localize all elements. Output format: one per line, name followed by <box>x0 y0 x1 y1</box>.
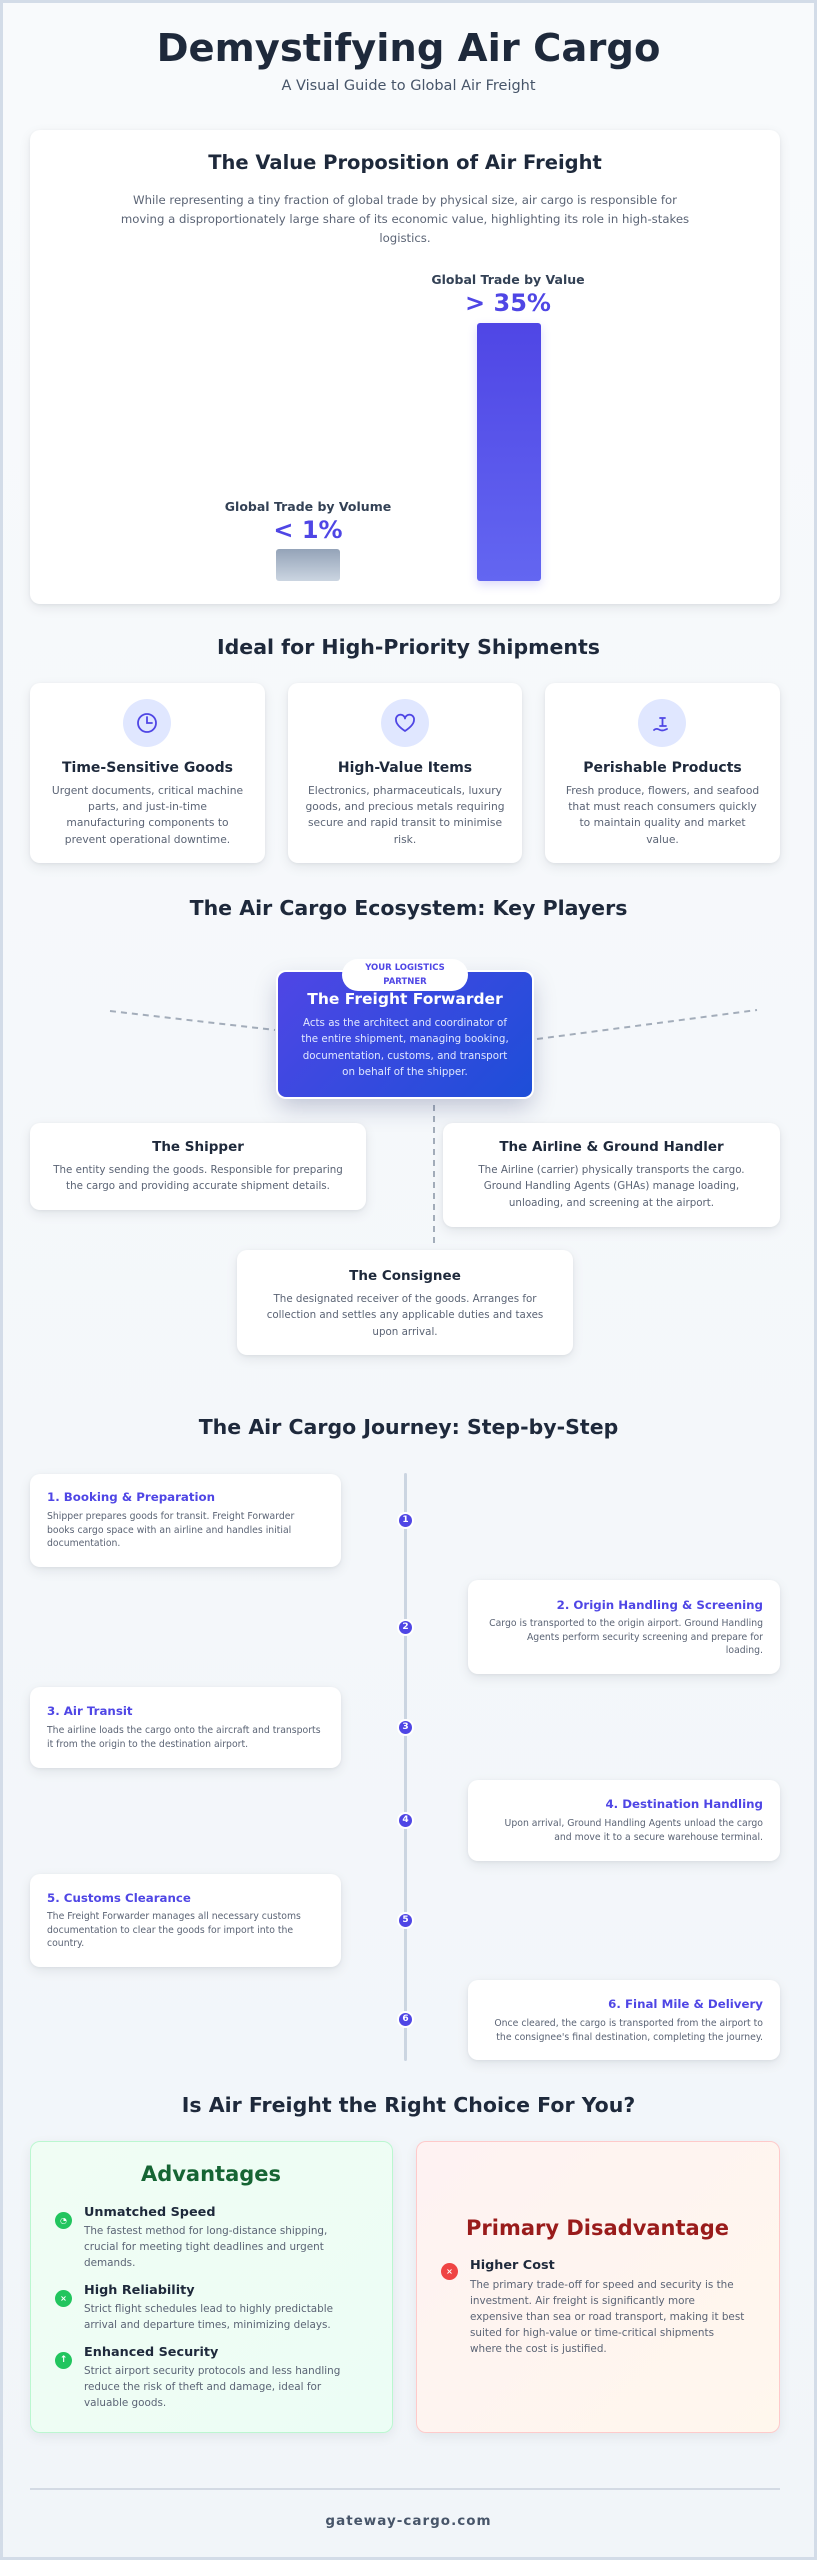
desc <box>52 784 243 846</box>
card: time-sensitive <box>30 683 265 863</box>
subtitle: A Visual Guide to Global Air Freight <box>281 78 536 94</box>
desc: to maintain quality and market <box>579 816 746 829</box>
timeline <box>397 1473 414 2061</box>
marker 5 <box>397 1912 414 1929</box>
step 1 <box>30 1474 341 1567</box>
item: reliability: High Reliability <box>84 2283 195 2298</box>
title: The Shipper <box>152 1139 244 1155</box>
heading: Primary Disadvantage <box>466 2216 729 2240</box>
panel: advantages <box>30 2141 393 2433</box>
step 4: Upon arrival, Ground Handling Agents unload the cargo <box>505 1818 763 1829</box>
heading: journey: The Air Cargo Journey: Step-by-Step <box>199 1415 618 1439</box>
item: reliability: × <box>60 2294 67 2303</box>
step 2: Agents perform security screening and prepare for <box>527 1632 763 1642</box>
desc: Electronics, pharmaceuticals, luxury <box>308 784 502 797</box>
item: cost: suited for high-value or time-critical shipments <box>470 2327 714 2339</box>
value: volume: < 1% <box>273 516 343 544</box>
bar: volume <box>276 549 340 581</box>
step 2 <box>468 1580 780 1674</box>
desc: manufacturing components to <box>66 816 229 829</box>
item: security: ↑ <box>60 2355 67 2365</box>
desc: Ground Handling Agents (GHAs) manage loading, <box>484 1180 739 1192</box>
badge: your logistics partner <box>342 959 468 991</box>
step 1: books cargo space with an airline and handles initial <box>47 1524 291 1536</box>
step 2: Cargo is transported to the origin airport. Ground Handling <box>489 1618 763 1629</box>
step 3 <box>30 1687 341 1768</box>
icon: hand <box>638 699 686 747</box>
desc: prevent operational downtime. <box>65 833 230 846</box>
heading: value proposition: The Value Proposition of Air Freight <box>208 151 602 174</box>
item: cost: Higher Cost <box>470 2258 555 2273</box>
text: value intro: logistics. <box>379 231 431 245</box>
icon: heart <box>381 699 429 747</box>
badge: your logistics partner: PARTNER <box>383 976 427 986</box>
step 3: it from the origin to the destination airport. <box>47 1738 248 1750</box>
item: cost: expensive than sea or road transport, making it best <box>470 2311 744 2323</box>
card: airline <box>443 1123 780 1227</box>
marker 6: 6 <box>402 2014 409 2024</box>
step 5 <box>30 1874 341 1967</box>
item: reliability <box>55 2283 333 2331</box>
step 1: 1. Booking & Preparation <box>47 1490 215 1504</box>
footer: gateway-cargo.com <box>325 2513 492 2529</box>
panel: value proposition <box>30 130 780 604</box>
item: speed <box>55 2205 327 2269</box>
marker 2: 2 <box>402 1622 409 1632</box>
step 5: country. <box>47 1938 84 1949</box>
item: speed: crucial for meeting tight deadlines and urgent <box>84 2241 324 2253</box>
item: speed: ◔ <box>60 2216 67 2225</box>
marker 1 <box>397 1512 414 1529</box>
title: The Freight Forwarder <box>307 990 503 1008</box>
marker 2 <box>397 1619 414 1636</box>
desc: on behalf of the shipper. <box>342 1066 468 1078</box>
value: value: > 35% <box>465 289 551 317</box>
desc: value. <box>646 833 679 846</box>
desc: Acts as the architect and coordinator of <box>303 1017 507 1029</box>
desc <box>267 1293 543 1338</box>
step 4: 4. Destination Handling <box>605 1797 763 1811</box>
desc: The designated receiver of the goods. Arranges for <box>274 1293 536 1305</box>
desc: Fresh produce, flowers, and seafood <box>566 784 759 797</box>
desc: the cargo and providing accurate shipment details. <box>66 1180 330 1192</box>
card: perishable <box>545 683 780 863</box>
title: Time-Sensitive Goods <box>62 760 233 776</box>
text: value intro: moving a disproportionately large share of its economic value, highlighting its role in high-stakes <box>121 212 689 226</box>
step 4 <box>468 1780 780 1861</box>
label: value: Global Trade by Value <box>431 272 585 287</box>
heading: high-priority shipments: Ideal for High-Priority Shipments <box>217 635 600 659</box>
desc: the entire shipment, managing booking, <box>301 1033 509 1045</box>
desc: unloading, and screening at the airport. <box>509 1197 714 1209</box>
badge: your logistics partner: YOUR LOGISTICS <box>365 963 445 973</box>
item: reliability: arrival and departure times, minimizing delays. <box>84 2319 331 2331</box>
item: cost: The primary trade-off for speed and security is the <box>470 2279 734 2291</box>
step 6: 6. Final Mile & Delivery <box>608 1997 763 2011</box>
panel: freight forwarder <box>278 972 532 1097</box>
bar chart: trade by volume vs value <box>225 272 585 588</box>
desc: that must reach consumers quickly <box>568 800 757 813</box>
desc: upon arrival. <box>372 1326 438 1338</box>
step 1: documentation. <box>47 1538 120 1549</box>
step 1: Shipper prepares goods for transit. Freight Forwarder <box>47 1511 294 1522</box>
desc: risk. <box>394 833 416 846</box>
marker 5: 5 <box>402 1915 409 1925</box>
item: reliability: Strict flight schedules lead to highly predictable <box>84 2303 333 2315</box>
step 5: The Freight Forwarder manages all necessary customs <box>47 1911 301 1922</box>
item: cost: investment. Air freight is significantly more <box>470 2295 695 2307</box>
heading: right choice: Is Air Freight the Right Choice For You? <box>182 2093 635 2117</box>
marker 3: 3 <box>402 1722 409 1732</box>
step 2: 2. Origin Handling & Screening <box>557 1598 763 1612</box>
desc <box>301 1017 509 1078</box>
step 6 <box>468 1980 780 2060</box>
card: high-value <box>288 683 522 863</box>
desc <box>478 1164 745 1209</box>
item: security <box>55 2345 340 2409</box>
item: cost: where the cost is justified. <box>470 2343 607 2355</box>
desc <box>306 784 504 846</box>
title: Perishable Products <box>583 760 742 776</box>
step 3: 3. Air Transit <box>47 1704 133 1718</box>
item: speed: Unmatched Speed <box>84 2205 215 2220</box>
item: cost <box>441 2258 744 2355</box>
desc: goods, and precious metals requiring <box>306 800 504 813</box>
desc: parts, and just-in-time <box>88 800 207 813</box>
card: shipper <box>30 1123 366 1210</box>
title: High-Value Items <box>338 760 472 776</box>
bar: value <box>477 323 541 581</box>
title: The Airline & Ground Handler <box>499 1139 724 1155</box>
title: The Consignee <box>349 1268 461 1284</box>
connector lines <box>110 1009 758 1243</box>
icon: clock <box>123 699 171 747</box>
label: volume: Global Trade by Volume <box>225 499 391 514</box>
panel: disadvantage <box>416 2141 780 2433</box>
desc: secure and rapid transit to minimise <box>308 816 502 829</box>
desc <box>566 784 759 846</box>
step 4: and move it to a secure warehouse terminal. <box>554 1832 763 1842</box>
item: security: valuable goods. <box>84 2397 166 2409</box>
desc: The entity sending the goods. Responsible for preparing <box>53 1164 343 1176</box>
desc: Urgent documents, critical machine <box>52 784 243 797</box>
step 3: The airline loads the cargo onto the aircraft and transports <box>47 1725 321 1736</box>
heading: Advantages <box>141 2162 281 2186</box>
marker 4 <box>397 1812 414 1829</box>
card: consignee <box>237 1250 573 1355</box>
marker 4: 4 <box>402 1815 409 1825</box>
marker 1: 1 <box>402 1515 409 1525</box>
item: security: reduce the risk of theft and damage, ideal for <box>84 2381 321 2393</box>
text: value intro: While representing a tiny fraction of global trade by physical size, air cargo is responsible for <box>133 193 677 207</box>
item: security: Strict airport security protocols and less handling <box>84 2365 340 2377</box>
desc: The Airline (carrier) physically transports the cargo. <box>478 1164 745 1176</box>
text: value intro <box>121 193 689 245</box>
desc: documentation, customs, and transport <box>303 1050 507 1062</box>
heading: ecosystem: The Air Cargo Ecosystem: Key Players <box>190 896 627 920</box>
desc <box>53 1164 343 1192</box>
step 5: 5. Customs Clearance <box>47 1891 191 1905</box>
item: security: Enhanced Security <box>84 2345 218 2360</box>
marker 3 <box>397 1719 414 1736</box>
step 5: documentation to clear the goods for import into the <box>47 1924 293 1936</box>
marker 6 <box>397 2011 414 2028</box>
title: Demystifying Air Cargo <box>157 26 660 71</box>
item: speed: The fastest method for long-distance shipping, <box>84 2225 327 2237</box>
step 2: loading. <box>726 1645 763 1656</box>
step 6: Once cleared, the cargo is transported from the airport to <box>494 2018 763 2029</box>
item: cost: × <box>446 2267 453 2276</box>
step 6: the consignee's final destination, completing the journey. <box>496 2032 763 2042</box>
item: speed: demands. <box>84 2257 135 2269</box>
desc: collection and settles any applicable duties and taxes <box>267 1309 543 1321</box>
